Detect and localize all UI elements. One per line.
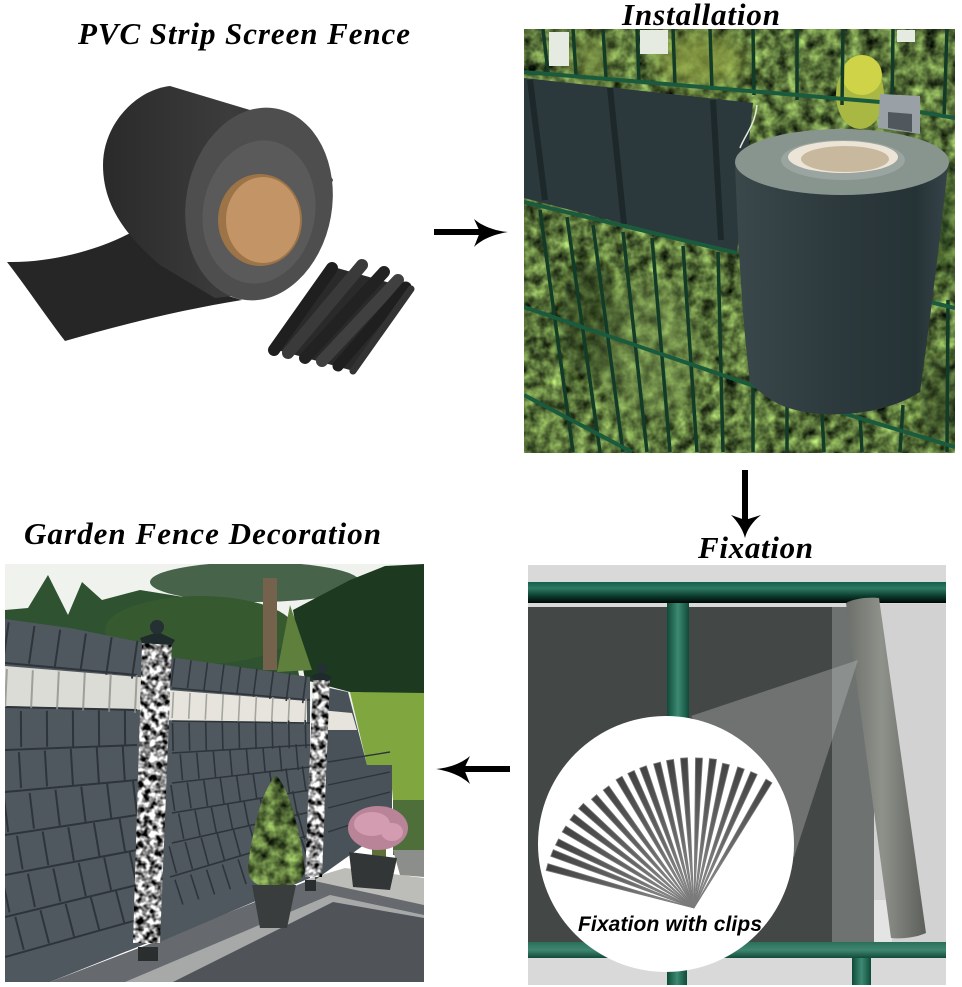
roll of strip (735, 129, 949, 414)
foliage background (524, 29, 955, 453)
sky gaps (549, 30, 915, 66)
title: Fixation: Fixation (697, 530, 813, 565)
magnified circle (538, 716, 794, 972)
fence section right (315, 686, 392, 880)
fan of clips (546, 758, 772, 908)
gabion post right (303, 663, 333, 891)
bundle of clips (270, 265, 411, 371)
green vertical post (667, 600, 689, 720)
sky (5, 564, 424, 764)
trees (5, 562, 424, 695)
dark strips on fence (524, 78, 757, 253)
fence section left (5, 619, 150, 982)
dark mesh strip (528, 607, 832, 942)
title: Garden Fence Decoration: Garden Fence Decoration (24, 516, 381, 551)
topiary in pot (245, 773, 307, 928)
fence wires (524, 29, 955, 452)
panel: installation photo (524, 29, 960, 453)
caption: Fixation with clips: Fixation with clips (578, 913, 762, 936)
top rail (528, 582, 946, 603)
metal bracket (878, 94, 920, 134)
unrolled sheet (7, 232, 242, 341)
lower posts (667, 958, 871, 985)
panel: PVC strip roll product photo (7, 86, 411, 371)
light background (528, 565, 946, 985)
arrow: right (434, 219, 508, 247)
yellow plant (836, 55, 884, 129)
magnifier cone (691, 660, 858, 857)
cardboard core (218, 174, 302, 266)
hedge on right (350, 692, 424, 855)
foliage light and dark masses (560, 32, 960, 445)
title: PVC Strip Screen Fence: PVC Strip Screen Fence (77, 16, 410, 51)
rolled strip (846, 598, 926, 938)
arrow: left (436, 756, 510, 784)
panel: garden fence photo (5, 562, 424, 982)
roll body (103, 86, 333, 298)
flowering plant in planter (348, 806, 424, 890)
arrow: down (731, 470, 761, 538)
gabion post left (130, 620, 175, 961)
panel: fixation diagram (528, 565, 946, 985)
gravel and paving (50, 868, 424, 982)
translucent strip (832, 607, 874, 942)
fence section middle (155, 655, 310, 944)
roll end face (170, 96, 348, 312)
bottom rail (528, 942, 946, 958)
